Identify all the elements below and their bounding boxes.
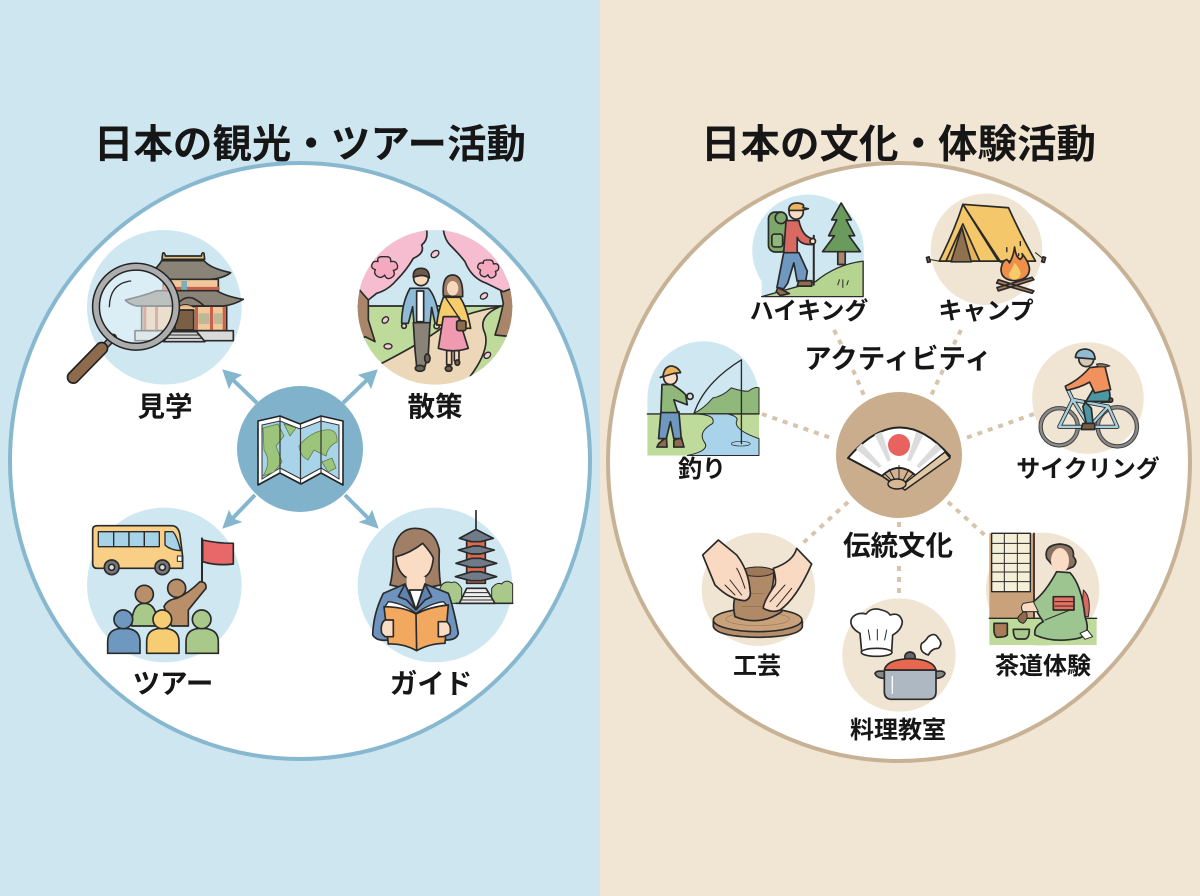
panel: culture and experience xyxy=(608,123,1190,761)
label 散策: 散策 xyxy=(408,391,462,422)
label 工芸: 工芸 xyxy=(733,653,781,680)
icon: tour bus and group xyxy=(87,508,242,662)
large circle left xyxy=(10,163,590,759)
label ハイキング: ハイキング xyxy=(750,297,868,325)
icon: tent and campfire xyxy=(926,194,1046,305)
sublabel 伝統文化: 伝統文化 xyxy=(843,530,953,561)
panel: sightseeing and tours xyxy=(10,123,590,759)
heading left: 日本の観光・ツアー活動 xyxy=(94,123,526,167)
label キャンプ: キャンプ xyxy=(938,298,1034,325)
hub: map xyxy=(237,386,363,512)
icon: couple strolling under cherry trees xyxy=(357,229,517,387)
icon: hiker xyxy=(752,195,864,297)
icon: cyclist xyxy=(1032,342,1144,454)
label 釣り: 釣り xyxy=(678,456,726,483)
label サイクリング: サイクリング xyxy=(1016,455,1160,483)
left panel background xyxy=(0,0,600,896)
arrow to ガイド xyxy=(345,495,378,528)
icon: chef hat and pot xyxy=(842,598,956,712)
right panel background xyxy=(600,0,1200,896)
label ガイド: ガイド xyxy=(390,668,472,699)
hub: folding fan xyxy=(836,392,962,518)
label 見学: 見学 xyxy=(138,391,192,422)
arrow to 見学 xyxy=(223,370,257,403)
sublabel アクティビティ: アクティビティ xyxy=(804,343,992,374)
arrow to 散策 xyxy=(343,370,377,403)
label 茶道体験: 茶道体験 xyxy=(995,653,1091,680)
icon: guide reading with pagoda xyxy=(358,508,513,662)
icon: temple with magnifier xyxy=(73,230,243,385)
large circle right xyxy=(608,163,1190,761)
heading right: 日本の文化・体験活動 xyxy=(701,123,1096,167)
label ツアー: ツアー xyxy=(133,668,213,699)
icon: angler xyxy=(647,341,759,456)
label 料理教室: 料理教室 xyxy=(850,717,946,744)
dotted connectors xyxy=(762,330,1034,597)
icon: pottery wheel xyxy=(702,533,815,646)
arrow to ツアー xyxy=(223,495,255,528)
icon: tea ceremony xyxy=(986,533,1099,646)
